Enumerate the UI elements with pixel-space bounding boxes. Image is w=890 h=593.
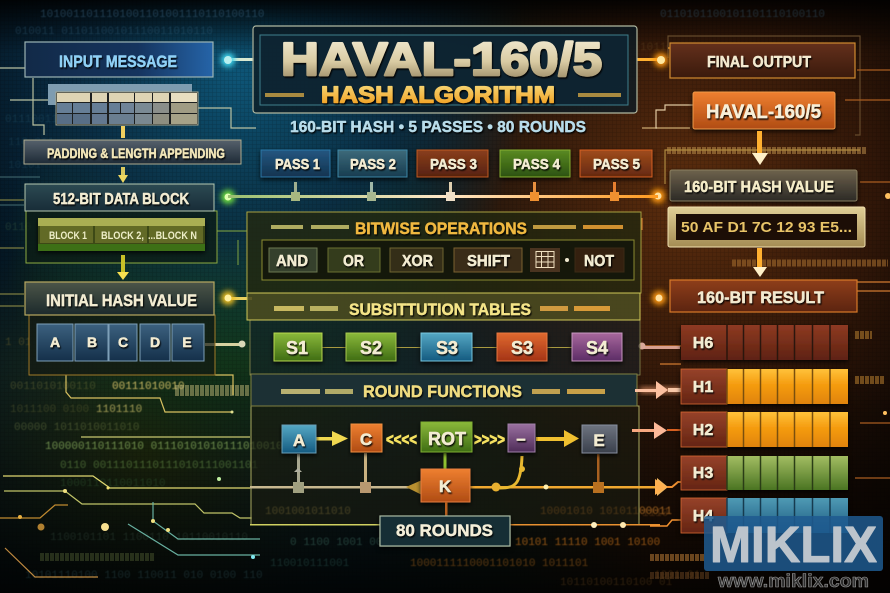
round function nodes: C [360,430,372,449]
heading: round functions: ROUND FUNCTIONS [363,382,522,401]
background binary data rows: 0110 1 [5,222,45,234]
register bar: H1 [681,369,848,404]
watermark url: www.miklix.com [717,571,869,591]
badge: haval-160/5 output: HAVAL-160/5 [706,102,821,123]
hash registers: D [150,334,160,350]
s-box tiles: S2 [360,338,382,358]
panel: title [253,26,637,113]
panel: input message [25,42,213,77]
icon: message data grid [48,84,198,125]
panel: 80 rounds: 80 ROUNDS [396,521,493,540]
pass buttons: PASS 1 [275,156,320,173]
round bus line [250,453,668,496]
round function nodes: – [516,429,526,448]
badge: haval-160/5 output [693,92,835,129]
panel: 160-bit result [670,280,857,312]
arrow: to initial hash [117,255,129,280]
s-box tiles: S3 [511,338,533,358]
panel: initial hash value [25,282,215,375]
round function nodes: A [293,431,305,450]
panel: 80 rounds [250,502,660,546]
panel: 512-bit data block: 512-BIT DATA BLOCK [53,191,189,208]
text: spec line: 160-BIT HASH • 5 PASSES • 80 ROUNDS [290,119,586,136]
register bar: H3 [681,456,848,490]
background binary data rows: 0110 0011101110111010111001101 [60,460,258,472]
panel: 160-bit hash value [670,170,857,201]
background binary data rows: 110010111001 [270,558,350,570]
background binary data rows: 010011 01101100101110011010110 [15,26,213,38]
arrow: to padding [121,126,125,138]
background binary data rows: 0110101100101101110100110 [660,9,825,21]
panel: padding and length appending [24,140,241,164]
operation buttons [269,248,624,272]
background binary data rows: 1 01 [5,337,32,349]
s-box tiles: S3 [436,338,458,358]
background binary data rows: 1010011011101001101001110110100110 [40,9,264,21]
s-box tiles: S1 [286,338,308,358]
heading: substitution tables: SUBSITTUTION TABLES [349,300,531,319]
panel: 160-bit result: 160-BIT RESULT [697,288,825,307]
background binary data rows: 00000 1011010011010 [14,422,139,434]
background binary data rows: 10101 [8,160,41,172]
heading: input message: INPUT MESSAGE [59,52,177,71]
pass bus line [228,182,658,201]
background binary data rows: 1000110110011010 [60,478,166,490]
pass buttons [261,150,652,177]
background binary data rows: 1001001011010 [265,506,351,518]
background binary data rows: 100000110111010 01110101010111010010110 [45,441,302,453]
operation buttons: SHIFT [467,253,510,270]
panel: 160-bit hash value: 160-BIT HASH VALUE [684,179,834,196]
operation buttons: NOT [584,253,614,270]
pass buttons: PASS 3 [430,156,477,173]
arrows into result registers [632,381,682,526]
operation buttons: OR [343,253,364,270]
panel: bitwise operations [247,212,641,293]
arrow: to hash value [752,131,768,165]
panel: final output [670,43,855,78]
watermark: miklix: MIKLIX [710,516,877,573]
round function nodes [282,422,617,502]
flow arrows [316,430,579,449]
panel: initial hash value: INITIAL HASH VALUE [46,291,197,310]
s-box tiles: S4 [586,338,608,358]
data blocks: BLOCK 1 [49,230,87,242]
operation buttons: XOR [402,253,433,270]
register bar: H1: H1 [693,379,713,396]
register bar: H4: H4 [693,508,713,525]
register bar: H4 [681,498,848,533]
panel: round functions [250,374,668,525]
background binary data rows: 1000111110001101010 1011101 [410,558,589,570]
background binary data rows: 0111001101 [5,114,71,126]
panel: padding and length appending: PADDING & LENGTH APPENDING [47,145,225,161]
background binary data rows: 00111010010 [112,381,185,393]
register bar: H2 [681,412,848,447]
hash registers [37,324,204,361]
flow arrows: <<<< [386,430,417,449]
background binary data rows: 1011100 0100 [10,404,89,416]
panel: 512-bit data block [25,184,217,263]
register bar: H6: H6 [693,335,713,352]
data blocks [38,218,205,251]
subtitle: hash algorithm: HASH ALGORITHM [321,82,555,108]
panel: hex digest: 50 AF D1 7C 12 93 E5... [681,219,852,236]
pass buttons: PASS 4 [513,156,561,173]
background binary data rows: 10101 11110 1001 10100 [515,537,660,549]
panel: substitution tables [247,293,640,375]
round function nodes: K [439,477,452,496]
data blocks: BLOCK 2, [101,230,144,242]
background binary data rows: 1101110 [96,404,142,416]
data blocks: ...BLOCK N [148,230,197,242]
background binary data rows: 110 011 [8,137,55,149]
background binary data rows: 0011010100110 [10,381,96,393]
hash registers: C [118,334,128,350]
background binary data rows: 1001 01 [654,570,701,582]
background binary data rows: 1100101101 1100110 10110010110 [50,532,248,544]
arrow: to result [753,248,767,277]
bit-strip decorations [40,150,888,576]
register bar: H2: H2 [693,422,713,439]
background binary data rows: 1011001 [640,42,687,54]
pass buttons: PASS 5 [593,156,640,173]
background binary data rows: 10101110100 1100 110011 010 0100 110 [25,570,263,582]
hash registers: B [87,334,97,350]
hash registers: A [50,334,60,350]
register bar: H6 [681,325,848,360]
heading: bitwise operations: BITWISE OPERATIONS [355,219,527,238]
s-box tiles [274,333,622,361]
round function nodes: E [593,431,605,450]
arrow: to data block [118,167,128,183]
icon: table grid [530,248,569,272]
background binary data rows: 10001010 10101100011 [540,506,672,518]
register bar: H3: H3 [693,465,713,482]
panel: hex digest [668,207,865,247]
title text: HAVAL-160/5 [281,33,602,85]
operation buttons: AND [276,253,308,270]
hash registers: E [182,334,192,350]
background binary data rows: 1110 [642,508,668,520]
round function nodes: ROT [428,429,466,449]
panel: final output: FINAL OUTPUT [707,54,811,71]
flow arrows: >>>> [474,430,505,449]
background binary data rows: 10110100110100 01 [560,577,673,589]
background binary data rows: 0 1100 1001 001 [290,537,389,549]
pass buttons: PASS 2 [350,156,396,173]
